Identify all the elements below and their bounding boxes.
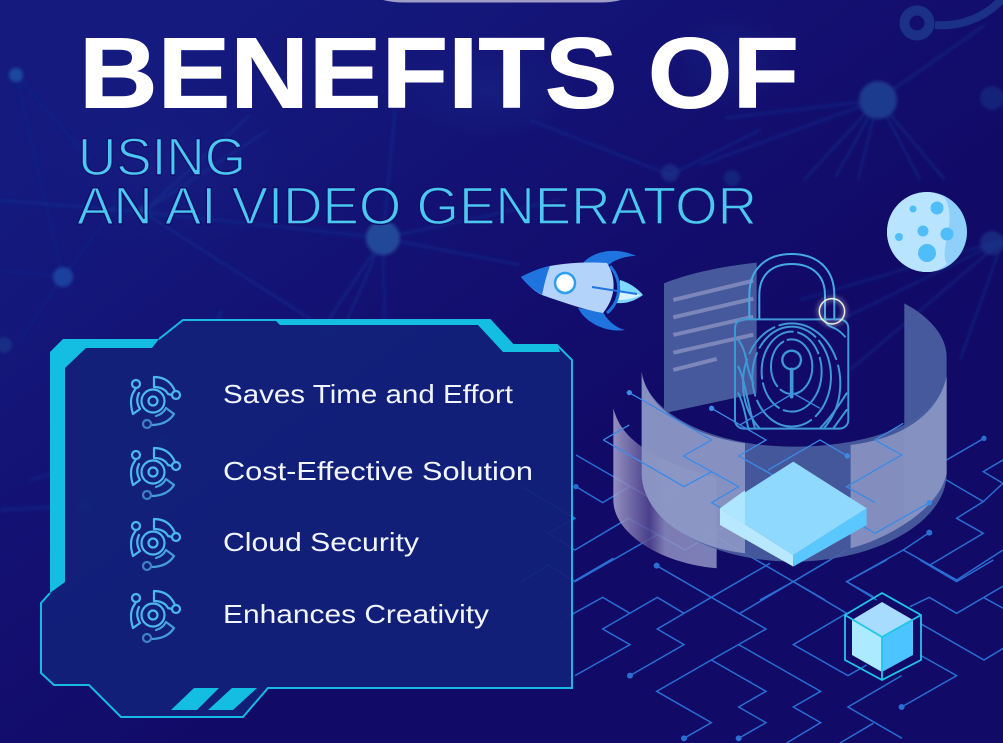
- benefit 4: [131, 591, 489, 642]
- icon: orbit gear: [131, 448, 180, 499]
- panel fill: [41, 320, 572, 717]
- rocket nose: [521, 266, 550, 295]
- label: Cost-Effective Solution: [223, 456, 533, 486]
- glowing ring: [819, 299, 845, 324]
- benefit 3: [131, 519, 419, 570]
- subtitle line 1: USING: [78, 128, 246, 187]
- icon: orbit gear: [131, 519, 180, 570]
- panel corner stripes: [171, 688, 257, 710]
- bottom fin: [578, 308, 625, 330]
- outer left band: [613, 408, 717, 568]
- background glow: [50, 10, 790, 250]
- circuit lines middle: [522, 436, 1003, 600]
- title: BENEFITS OF: [79, 18, 799, 130]
- circuit overlay: [603, 390, 932, 550]
- front band: [642, 372, 947, 562]
- shackle: [749, 254, 834, 320]
- top edge bar: [383, 0, 621, 2]
- panel thick left corner: [50, 339, 159, 593]
- benefit 1: [131, 377, 514, 428]
- panel top right accent: [275, 320, 560, 352]
- rocket window: [555, 273, 575, 293]
- front band left panel: [642, 372, 745, 553]
- panel outline: [41, 320, 572, 717]
- icon: orbit gear: [131, 377, 180, 428]
- icon: cube: [845, 593, 921, 680]
- network background: [0, 25, 1003, 540]
- icon: rocket: [521, 251, 643, 330]
- illustration: security cylinder: [603, 254, 947, 568]
- label: Enhances Creativity: [223, 599, 489, 629]
- panel: benefits list: [41, 320, 572, 717]
- flame: [616, 280, 643, 303]
- front band right panel: [851, 377, 947, 548]
- icon: orbit gear: [131, 591, 180, 642]
- lock body: [735, 319, 848, 429]
- benefit 2: [131, 448, 533, 499]
- padlock: [735, 254, 848, 443]
- subtitle line 2: AN AI VIDEO GENERATOR: [77, 177, 757, 236]
- central plate: [720, 462, 867, 567]
- icon: moon: [887, 192, 967, 272]
- fingerprint: [737, 320, 848, 428]
- label: Cloud Security: [223, 527, 419, 557]
- back band right: [904, 303, 947, 523]
- top right connector ring: [904, 0, 1003, 36]
- label: Saves Time and Effort: [223, 379, 514, 409]
- rocket body: [521, 262, 614, 313]
- circuit lines lower right: [567, 558, 1003, 743]
- document: [664, 263, 757, 413]
- top fin: [583, 251, 636, 266]
